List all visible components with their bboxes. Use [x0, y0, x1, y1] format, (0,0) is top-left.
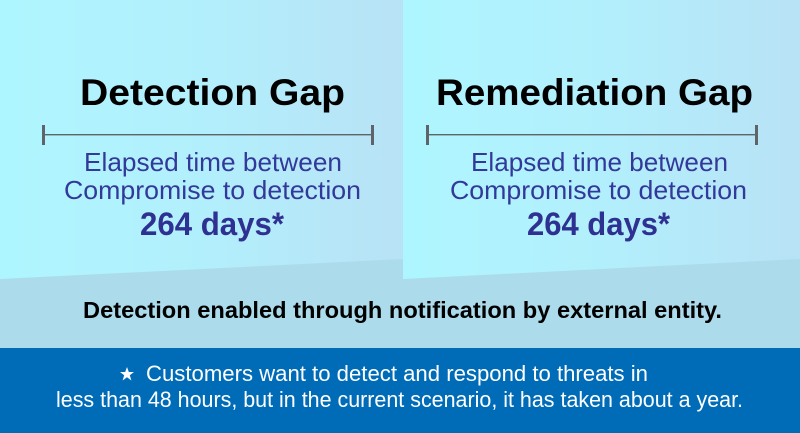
description: remediation: Compromise to detection: [450, 175, 747, 205]
span ruler: remediation: [426, 125, 758, 145]
footnote line 2: less than 48 hours, but in the current scenario, it has taken about a year.: [56, 387, 743, 412]
icon: asterisk star: [120, 367, 134, 380]
description: detection: Compromise to detection: [64, 175, 361, 205]
text: detection note: Detection enabled through notification by external entity.: [83, 297, 722, 323]
heading: remediation gap: Remediation Gap: [436, 72, 753, 113]
panel: remediation gap: [403, 0, 800, 279]
stat: detection 264 days: 264 days*: [140, 206, 285, 242]
description: remediation: [450, 147, 747, 205]
stat: remediation 264 days: 264 days*: [527, 206, 671, 242]
description: remediation: Elapsed time between: [471, 147, 728, 177]
heading: detection gap: Detection Gap: [80, 72, 345, 113]
panel: detection gap: [0, 0, 403, 279]
span ruler: detection: [42, 125, 374, 145]
footer band: [0, 348, 800, 433]
description: detection: Elapsed time between: [84, 147, 342, 177]
footnote line 1: Customers want to detect and respond to threats in: [146, 361, 648, 386]
description: detection: [64, 147, 361, 205]
